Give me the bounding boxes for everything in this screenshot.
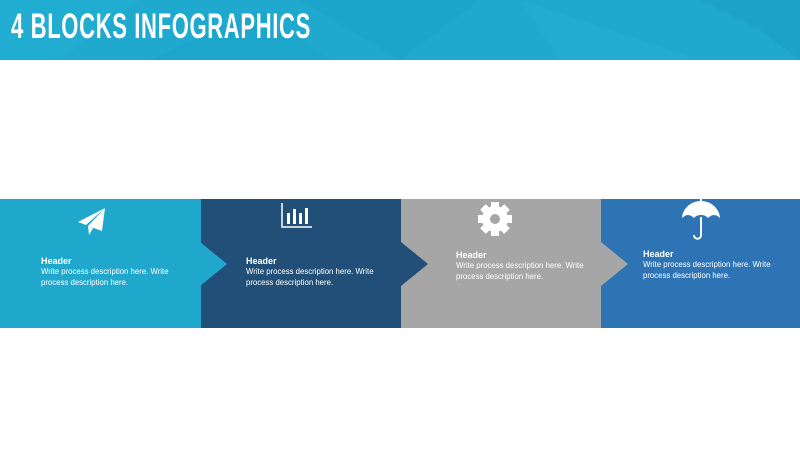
header band — [0, 0, 800, 60]
text: block 1 — [41, 256, 169, 286]
icon: paper plane — [78, 208, 105, 235]
text: block 4: Header — [643, 249, 674, 259]
arrow 1 — [201, 243, 227, 285]
text: block 4 — [643, 249, 771, 280]
text: block 2: Write process description here. Write process description here. — [246, 267, 374, 286]
text: block 3: Header — [456, 250, 487, 260]
block 1 — [0, 199, 201, 328]
text: block 4: Write process description here. Write process description here. — [643, 260, 771, 280]
block 2 — [201, 199, 401, 328]
icon: umbrella — [682, 199, 720, 240]
text: block 1: Header — [41, 256, 72, 266]
block 3 — [401, 199, 601, 328]
block 4 — [601, 199, 800, 328]
icon: bar chart — [281, 203, 312, 228]
text: block 2: Header — [246, 256, 277, 266]
arrow 2 — [401, 242, 428, 286]
text: block 3 — [456, 250, 584, 280]
text: block 3: Write process description here. Write process description here. — [456, 261, 584, 280]
icon: gear — [478, 202, 512, 236]
text: block 1: Write process description here. Write process description here. — [41, 267, 169, 286]
arrow 3 — [601, 242, 628, 286]
title: 4 BLOCKS INFOGRAPHICS — [11, 7, 311, 46]
text: block 2 — [246, 256, 374, 286]
